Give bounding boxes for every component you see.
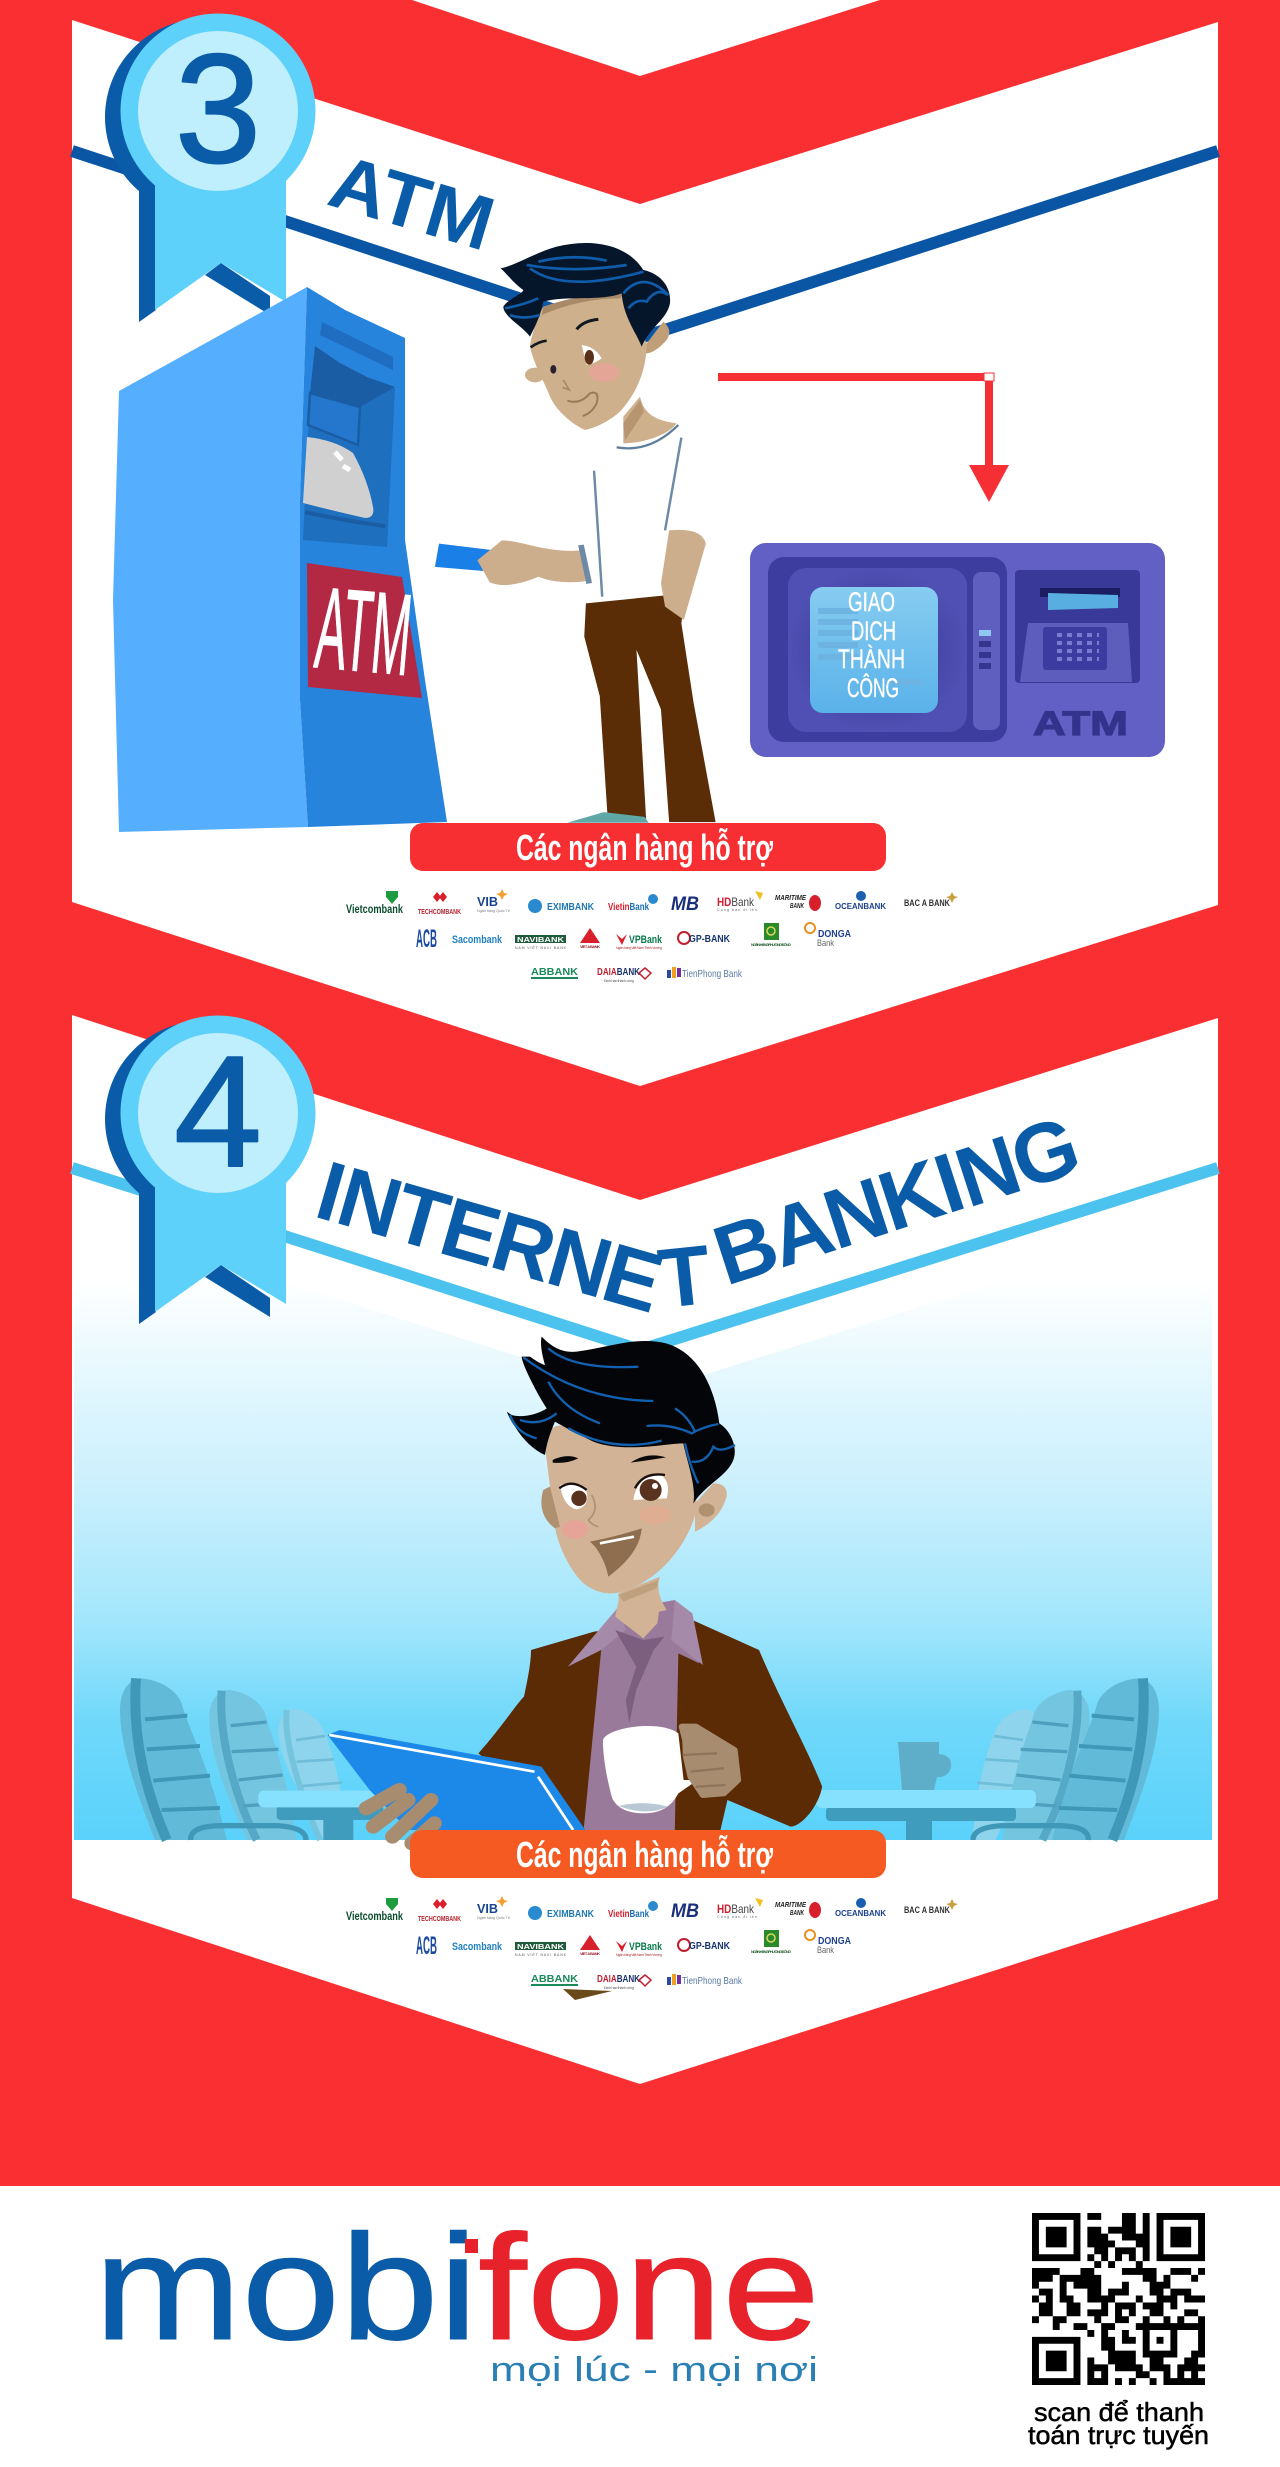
bank logos: DONGA	[818, 1936, 851, 1947]
bank logos: VIB	[477, 894, 498, 909]
bank logos: ABBANK	[531, 1974, 579, 1985]
QR code	[1032, 2216, 1205, 2382]
pill: supported banks	[410, 823, 886, 871]
illustration: ATM kiosk	[113, 287, 447, 832]
bank logos: Định hạn thành công	[604, 978, 634, 983]
man head	[507, 1337, 735, 1620]
bank logos: Định hạn thành công	[604, 1985, 634, 1990]
character: man with card	[435, 243, 716, 823]
man head	[501, 243, 678, 448]
tagline: mọi lúc - mọi nơi	[490, 2351, 818, 2389]
arrow: red elbow arrow	[718, 373, 1009, 502]
panel: ATM step 3	[72, 14, 1218, 1086]
screen message	[838, 587, 905, 703]
panel 4 white chevron background	[72, 1015, 1218, 2084]
bank logos: DAIABANK	[597, 967, 641, 978]
ribbon badge number 4	[105, 1016, 316, 1324]
bank logos: BAC A BANK	[904, 1905, 950, 1915]
ribbon badge number 3: 3	[175, 22, 261, 195]
ribbon badge number 3	[105, 14, 316, 322]
ribbon badge number 4: 4	[174, 1024, 262, 1200]
screen message: CÔNG	[847, 672, 899, 703]
bank logos: DAIABANK	[597, 1974, 641, 1985]
bank logos: ACB	[416, 1932, 437, 1960]
bank logos: Vietcombank	[346, 1909, 403, 1923]
bank logos: NAVIBANK	[517, 937, 564, 944]
bank logos: Cùng bạn đi lên	[717, 907, 757, 912]
bank logos	[346, 1896, 958, 2000]
bank logos: EXIMBANK	[547, 902, 595, 913]
bank logos: ABBANK	[531, 967, 579, 978]
bank logos: Bank	[817, 1945, 834, 1955]
blue chevron stripe	[72, 151, 1218, 338]
bank logos: TienPhong Bank	[682, 1975, 743, 1987]
left chairs and table	[120, 1678, 385, 1840]
top white chevron notch	[412, 0, 880, 76]
bank logos: MARITIME	[775, 1902, 806, 1909]
pill: supported banks	[410, 1830, 886, 1878]
screen message: GIAO	[848, 587, 895, 617]
bank logos: MB	[671, 1901, 699, 1922]
footer: MobiFone logo	[94, 2203, 820, 2389]
QR caption: scan để thanh	[1034, 2397, 1204, 2427]
bank logos: VPBank	[629, 934, 663, 946]
man body, tablet and cup	[328, 1600, 822, 1843]
bank logos: VietinBank	[608, 1909, 649, 1920]
panel: ATM step 3: ATM	[311, 562, 417, 700]
bank logos: Sacombank	[452, 1941, 503, 1953]
bank logos: Sacombank	[452, 934, 503, 946]
bank logos: HDBank	[717, 895, 755, 909]
character: man with tablet and cup	[328, 1337, 822, 1843]
QR caption: toán trực tuyến	[1028, 2420, 1209, 2450]
man body	[435, 438, 716, 823]
bank logos: ACB	[416, 925, 437, 953]
pill: supported banks: Các ngân hàng hỗ trợ	[516, 1834, 773, 1875]
bank logos: VPBank	[629, 1941, 663, 1953]
bank logos: Cùng bạn đi lên	[717, 1914, 757, 1919]
bank logos: VIB	[477, 1901, 498, 1916]
bank logos: Ngân hàng Việt Nam Thịnh Vượng	[616, 946, 662, 950]
pill: supported banks: Các ngân hàng hỗ trợ	[516, 827, 773, 868]
bank logos: MB	[671, 894, 699, 915]
bank logos: DONGA	[818, 929, 851, 940]
screen message: THÀNH	[838, 644, 905, 674]
right table cup	[898, 1742, 951, 1790]
bank logos: Ngân hàng Quốc Tế	[477, 908, 511, 913]
bank logos: BAC A BANK	[904, 898, 950, 908]
bank logos: GP-BANK	[689, 934, 731, 945]
bank logos: Ngân hàng Việt Nam Thịnh Vượng	[616, 1953, 662, 1957]
bank logos: NGÂN HÀNG PHƯƠNG ĐÔNG	[751, 942, 791, 947]
bank logos: OCEANBANK	[835, 1908, 887, 1918]
bank logos: NAM VIỆT NAVI BANK	[515, 945, 567, 950]
bank logos: VIET A BANK	[580, 1951, 600, 1956]
bank logos: HDBank	[717, 1902, 755, 1916]
screen message: DICH	[851, 616, 896, 646]
bank logos: Ngân hàng Quốc Tế	[477, 1915, 511, 1920]
panel 3 white chevron background	[72, 20, 1218, 1086]
bank logos: Vietcombank	[346, 902, 403, 916]
footer: MobiFone logo: mobi	[94, 2203, 478, 2371]
bank logos: TienPhong Bank	[682, 968, 743, 980]
bank logos: NGÂN HÀNG PHƯƠNG ĐÔNG	[751, 1949, 791, 1954]
sky gradient background	[74, 1215, 1212, 1840]
bank logos: NAVIBANK	[517, 1944, 564, 1951]
footer: MobiFone logo: fone	[478, 2203, 820, 2371]
bank logos: MARITIME	[775, 895, 806, 902]
cafe scene: chairs and tables	[120, 1678, 1159, 1840]
bank logos: VIET A BANK	[580, 944, 600, 949]
bank logos: BANK	[790, 1910, 805, 1917]
bank logos	[346, 889, 958, 983]
bank logos: GP-BANK	[689, 1941, 731, 1952]
heading: ATM: ATM	[320, 139, 503, 267]
bank logos: Bank	[817, 938, 834, 948]
bank logos: TECHCOMBANK	[418, 1916, 461, 1923]
bank logos: EXIMBANK	[547, 1909, 595, 1920]
light blue chevron stripe	[72, 1168, 1218, 1350]
bank logos: VietinBank	[608, 902, 649, 913]
bank logos: NAM VIỆT NAVI BANK	[515, 1952, 567, 1957]
illustration: purple ATM screen: ATM	[1033, 705, 1128, 743]
bank logos: OCEANBANK	[835, 901, 887, 911]
right chairs and table	[972, 1678, 1159, 1840]
illustration: purple ATM screen	[750, 543, 1165, 757]
bank logos: TECHCOMBANK	[418, 909, 461, 916]
bank logos: BANK	[790, 903, 805, 910]
QR caption	[1028, 2397, 1209, 2450]
